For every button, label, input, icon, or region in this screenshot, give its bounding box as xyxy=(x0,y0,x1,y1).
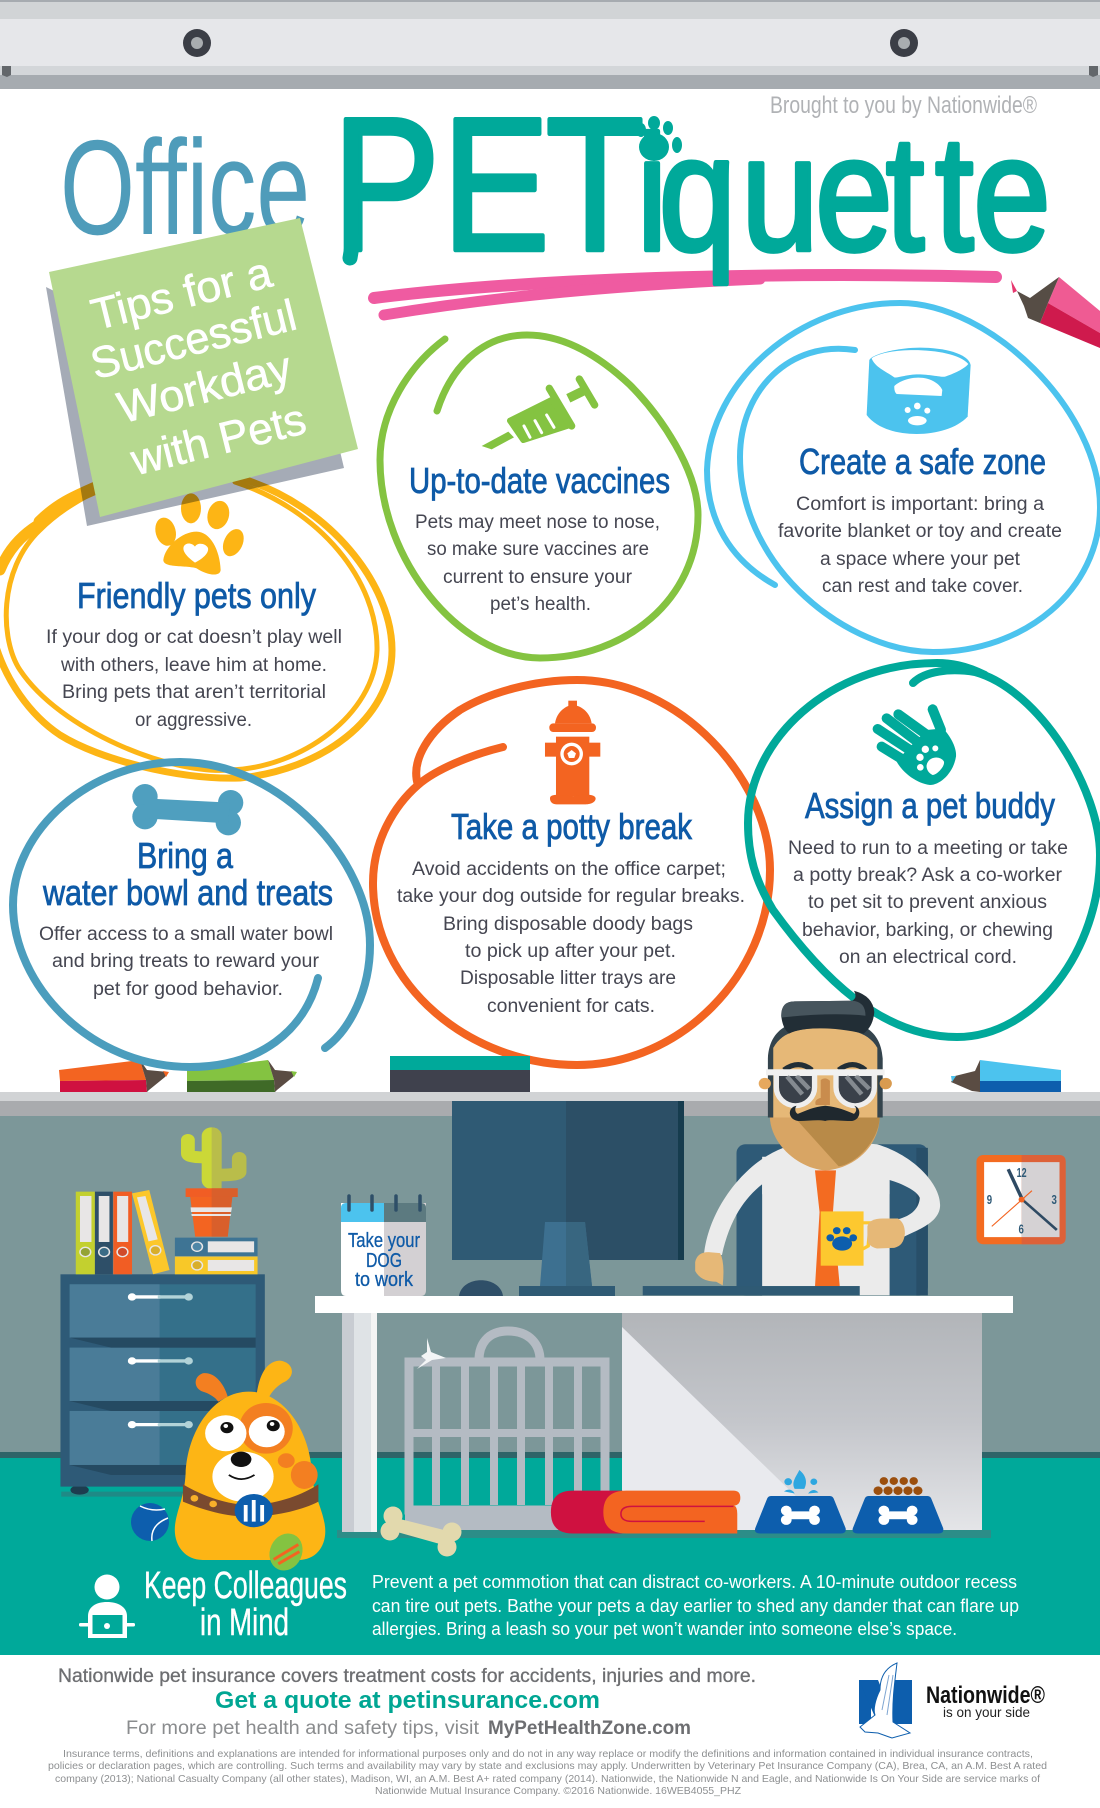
title: Office: Office xyxy=(60,112,310,263)
blue tennis ball xyxy=(131,1503,169,1541)
cactus plant xyxy=(186,1127,239,1237)
screw right xyxy=(890,29,918,57)
panel: assign a pet buddy xyxy=(748,663,1100,1037)
calendar text: Take your xyxy=(348,1230,420,1252)
tips line xyxy=(126,1718,691,1739)
body text: If your dog or cat doesn’t play well xyxy=(46,627,342,648)
icon: paw dot xyxy=(636,116,682,161)
ring xyxy=(0,478,392,778)
tie xyxy=(815,1170,840,1287)
body xyxy=(175,1392,325,1560)
body text: Bring disposable doody bags xyxy=(443,914,693,935)
sticky note text: with Pets xyxy=(125,395,311,485)
chew bone xyxy=(380,1506,462,1556)
icon: hand with paw xyxy=(878,709,956,785)
icon: syringe xyxy=(482,379,595,449)
panel: friendly pets only xyxy=(0,478,392,778)
banner text xyxy=(372,1572,1019,1639)
quote call to action: Get a quote at petinsurance.com xyxy=(215,1687,600,1714)
sponsor line: Brought to you by Nationwide® xyxy=(770,92,1037,119)
desk leg xyxy=(342,1313,354,1532)
body text: favorite blanket or toy and create xyxy=(778,521,1062,542)
food bowl xyxy=(853,1477,943,1534)
icon: pet bed xyxy=(867,348,971,434)
clock numerals: 3 xyxy=(1051,1193,1057,1207)
body text: or aggressive. xyxy=(135,710,252,731)
heading: Friendly pets only xyxy=(77,575,316,616)
tips line: For more pet health and safety tips, visit xyxy=(126,1718,480,1739)
body text: Disposable litter trays are xyxy=(460,968,676,989)
banner text: can tire out pets. Bathe your pets a day earlier to shed any dander that can flare up xyxy=(372,1596,1019,1616)
head xyxy=(759,1019,892,1170)
hair xyxy=(781,991,874,1034)
desk xyxy=(315,1296,1013,1538)
green marker xyxy=(187,1060,297,1092)
icon: fire hydrant xyxy=(545,701,600,804)
sticky note text: Successful xyxy=(86,291,301,389)
heading xyxy=(42,835,333,913)
panel: up-to-date vaccines xyxy=(380,335,698,658)
icon: yellow paw with heart xyxy=(152,493,248,575)
heading: Up-to-date vaccines xyxy=(409,460,670,501)
clock numerals: 9 xyxy=(987,1193,992,1207)
title: PETiquette: PET xyxy=(332,79,644,291)
muzzle xyxy=(212,1452,274,1502)
stacked books xyxy=(390,1056,530,1092)
pink marker xyxy=(1011,277,1100,348)
banner: keep colleagues in mind xyxy=(79,1565,1019,1644)
ring xyxy=(380,335,698,658)
coffee mug xyxy=(821,1211,870,1266)
logo mark xyxy=(859,1663,912,1738)
body text: Offer access to a small water bowl xyxy=(39,924,333,945)
sticky note xyxy=(46,218,358,526)
banner text: allergies. Bring a leash so your pet won’t wander into someone else’s space. xyxy=(372,1619,957,1639)
heading: Create a safe zone xyxy=(799,441,1046,482)
cabinet xyxy=(60,1274,265,1497)
logo: Nationwide xyxy=(859,1663,1045,1738)
body text: on an electrical cord. xyxy=(839,947,1017,968)
banner heading: Keep Colleagues xyxy=(144,1565,347,1607)
water and food bowls xyxy=(755,1470,943,1534)
body text: and bring treats to reward your xyxy=(52,951,320,972)
disclaimer: Insurance terms, definitions and explanations are intended for informational purposes only and do not in any way replace or modify the definitions and information contained in individual insurance contracts, xyxy=(63,1748,1033,1760)
disclaimer: policies or declaration pages, which are controlling. Such terms and availability may vary by state and exclusions may apply. Underwritten by Veterinary Pet Insurance Company (CA), Brea, CA, an A.M. Best A rated xyxy=(48,1760,1047,1772)
sticky note text: Tips for a xyxy=(86,248,277,340)
shirt xyxy=(704,1141,940,1295)
blue marker xyxy=(951,1060,1061,1092)
disclaimer xyxy=(48,1748,1047,1797)
body text: Bring pets that aren’t territorial xyxy=(62,682,326,703)
body text: Comfort is important: bring a xyxy=(796,494,1044,515)
banner heading: in Mind xyxy=(200,1602,289,1644)
hands xyxy=(695,1219,905,1285)
tips line: MyPetHealthZone.com xyxy=(488,1718,691,1739)
body text xyxy=(788,838,1068,968)
wall clock xyxy=(976,1155,1066,1244)
sunglasses and eyebrows xyxy=(766,1065,885,1106)
panel: water bowl and treats xyxy=(13,762,370,1067)
body text: pet’s health. xyxy=(490,594,591,615)
body text xyxy=(778,494,1062,597)
green ball xyxy=(263,1528,309,1576)
body text: a potty break? Ask a co-worker xyxy=(793,865,1063,886)
binders xyxy=(76,1190,258,1274)
calendar text xyxy=(348,1230,420,1291)
sticky note text: Workday xyxy=(113,343,296,433)
body text xyxy=(39,924,333,1000)
banner heading xyxy=(144,1565,347,1644)
icon: bone xyxy=(132,784,243,835)
body text: take your dog outside for regular breaks. xyxy=(397,886,745,907)
footer xyxy=(48,1663,1047,1797)
water bowl xyxy=(755,1470,846,1534)
orange marker xyxy=(59,1060,169,1092)
clock numerals: 6 xyxy=(1019,1222,1024,1236)
title: PETiquette: iquette xyxy=(637,102,1051,286)
body text: can rest and take cover. xyxy=(822,576,1023,597)
icon: person with laptop xyxy=(79,1574,135,1638)
logo tagline: is on your side xyxy=(943,1704,1030,1720)
clock numerals xyxy=(987,1166,1057,1236)
body text: so make sure vaccines are xyxy=(427,539,649,560)
body text: pet for good behavior. xyxy=(93,979,283,1000)
panel: take a potty break xyxy=(373,680,770,1065)
top rail xyxy=(0,0,1100,89)
heading: Take a potty break xyxy=(451,806,693,847)
eyes xyxy=(205,1415,285,1451)
wall and shelf xyxy=(0,1092,1100,1655)
ring xyxy=(373,680,770,1065)
spots xyxy=(239,1403,318,1489)
sticky note text xyxy=(86,248,311,485)
pink highlighter underline xyxy=(374,275,996,315)
calendar text: DOG xyxy=(366,1250,402,1272)
body text: current to ensure your xyxy=(443,567,633,588)
body text: Pets may meet nose to nose, xyxy=(415,512,660,533)
ring xyxy=(707,303,1100,652)
collar xyxy=(183,1484,318,1527)
filing cabinet with binders, plant xyxy=(60,1127,265,1497)
title: PETiquette xyxy=(332,79,1051,291)
body text xyxy=(46,627,342,731)
desk calendar xyxy=(341,1196,426,1296)
sparkle xyxy=(417,1338,446,1369)
keyboard xyxy=(643,1286,860,1295)
disclaimer: Nationwide Mutual Insurance Company. ©2016 Nationwide. 16WEB4055_PHZ xyxy=(375,1785,742,1797)
desk markers and books xyxy=(59,1056,1061,1092)
panel: create a safe zone xyxy=(707,303,1100,652)
body text: to pick up after your pet. xyxy=(465,941,676,962)
body text xyxy=(415,512,660,615)
ring xyxy=(13,762,370,1067)
rolled blanket xyxy=(551,1491,740,1534)
heading: Bring a xyxy=(137,835,234,876)
man at desk xyxy=(643,991,940,1295)
body text: Need to run to a meeting or take xyxy=(788,838,1068,859)
mustache xyxy=(790,1106,859,1121)
clock numerals: 12 xyxy=(1017,1166,1027,1180)
body text: to pet sit to prevent anxious xyxy=(808,892,1047,913)
ring xyxy=(748,663,1100,1037)
body text: convenient for cats. xyxy=(487,996,655,1017)
pet crate xyxy=(405,1331,615,1530)
body text: with others, leave him at home. xyxy=(60,655,327,676)
logo wordmark: Nationwide® xyxy=(926,1682,1045,1709)
screw left xyxy=(183,29,211,57)
heading: water bowl and treats xyxy=(42,872,333,913)
body text: behavior, barking, or chewing xyxy=(802,920,1053,941)
cartoon dog xyxy=(175,1361,325,1560)
monitor xyxy=(452,1101,684,1296)
body text: a space where your pet xyxy=(820,549,1021,570)
disclaimer: company (2013); National Casualty Company (all other states), Madison, WI, an A.M. Best A+ rated company (2014). Nationwide, the Nationwide N and Eagle, and Nationwide Is On Your Side are service marks of xyxy=(55,1773,1040,1785)
chair xyxy=(737,1144,928,1295)
banner text: Prevent a pet commotion that can distract co-workers. A 10-minute outdoor recess xyxy=(372,1572,1017,1592)
office scene xyxy=(0,991,1100,1655)
body text xyxy=(397,859,745,1017)
insurance line: Nationwide pet insurance covers treatment costs for accidents, injuries and more. xyxy=(58,1666,756,1687)
body text: Avoid accidents on the office carpet; xyxy=(412,859,726,880)
calendar text: to work xyxy=(355,1269,414,1291)
ears xyxy=(196,1361,292,1402)
